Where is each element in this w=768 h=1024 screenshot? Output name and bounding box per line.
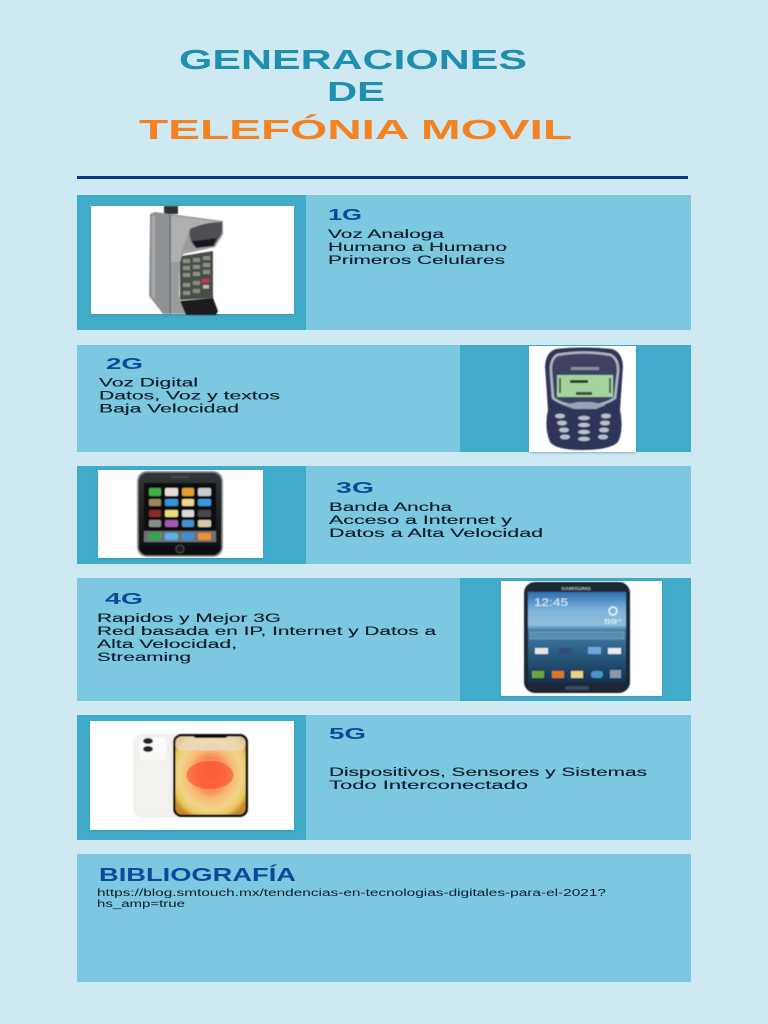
panel: 2G [77, 345, 691, 453]
text: 5G description: Dispositivos, Sensores y Sistemas [329, 767, 647, 779]
heading: 3G: 3G [336, 480, 374, 497]
text: 5G description [329, 767, 647, 792]
panel: 1G [77, 195, 691, 330]
heading: bibliografía: BIBLIOGRAFÍA [99, 864, 296, 885]
panel: bibliografía [77, 854, 691, 982]
text: 1G description [328, 229, 507, 267]
title: TELEFÓNIA MOVIL [139, 114, 572, 145]
text: 2G description: Baja Velocidad [99, 404, 239, 416]
icon: brick phone 1G [149, 206, 223, 315]
icon: smartphone 3G [137, 471, 223, 557]
text: 2G description: Datos, Voz y textos [99, 390, 280, 402]
text: 5G description: Todo Interconectado [329, 780, 528, 792]
text: 3G description [329, 502, 543, 540]
text: 2G description: Voz Digital [99, 378, 198, 390]
title: GENERACIONES [179, 44, 527, 75]
text: 2G description [99, 378, 280, 416]
icon: modern phone 5G [134, 734, 248, 817]
text: 3G description: Banda Ancha [329, 502, 453, 514]
heading: 2G: 2G [106, 356, 143, 373]
icon: Nokia phone 2G [545, 348, 623, 450]
text: 1G description: Primeros Celulares [328, 255, 505, 267]
text: 3G description: Acceso a Internet y [329, 515, 512, 527]
title: DE [327, 76, 385, 107]
panel: 3G [77, 466, 691, 564]
heading: 4G: 4G [105, 591, 143, 608]
title [139, 44, 572, 145]
text: source link: https://blog.smtouch.mx/tendencias-en-tecnologias-digitales-para-el-2021? [97, 888, 607, 899]
text: 1G description: Voz Analoga [328, 229, 445, 241]
text: source link [97, 888, 607, 910]
heading: 5G: 5G [329, 726, 366, 743]
icon: Samsung phone 4G: SAMSUNG [561, 586, 592, 591]
text: 4G description: Rapidos y Mejor 3G [97, 613, 281, 625]
text: 4G description: Alta Velocidad, [97, 639, 237, 651]
text: source link: hs_amp=true [97, 899, 186, 910]
text: 4G description: Streaming [97, 652, 191, 664]
heading: 1G: 1G [328, 207, 362, 224]
text: 1G description: Humano a Humano [328, 242, 507, 254]
icon: Samsung phone 4G [524, 582, 630, 693]
text: 4G description: Red basada en IP, Internet y Datos a [97, 626, 437, 638]
panel: 5G [77, 715, 691, 840]
icon: Samsung phone 4G: 59° [604, 618, 622, 626]
text: 4G description [97, 613, 437, 664]
text: 3G description: Datos a Alta Velocidad [329, 528, 543, 540]
panel: 4G [77, 578, 691, 701]
icon: Samsung phone 4G: 12:45 [534, 597, 568, 609]
